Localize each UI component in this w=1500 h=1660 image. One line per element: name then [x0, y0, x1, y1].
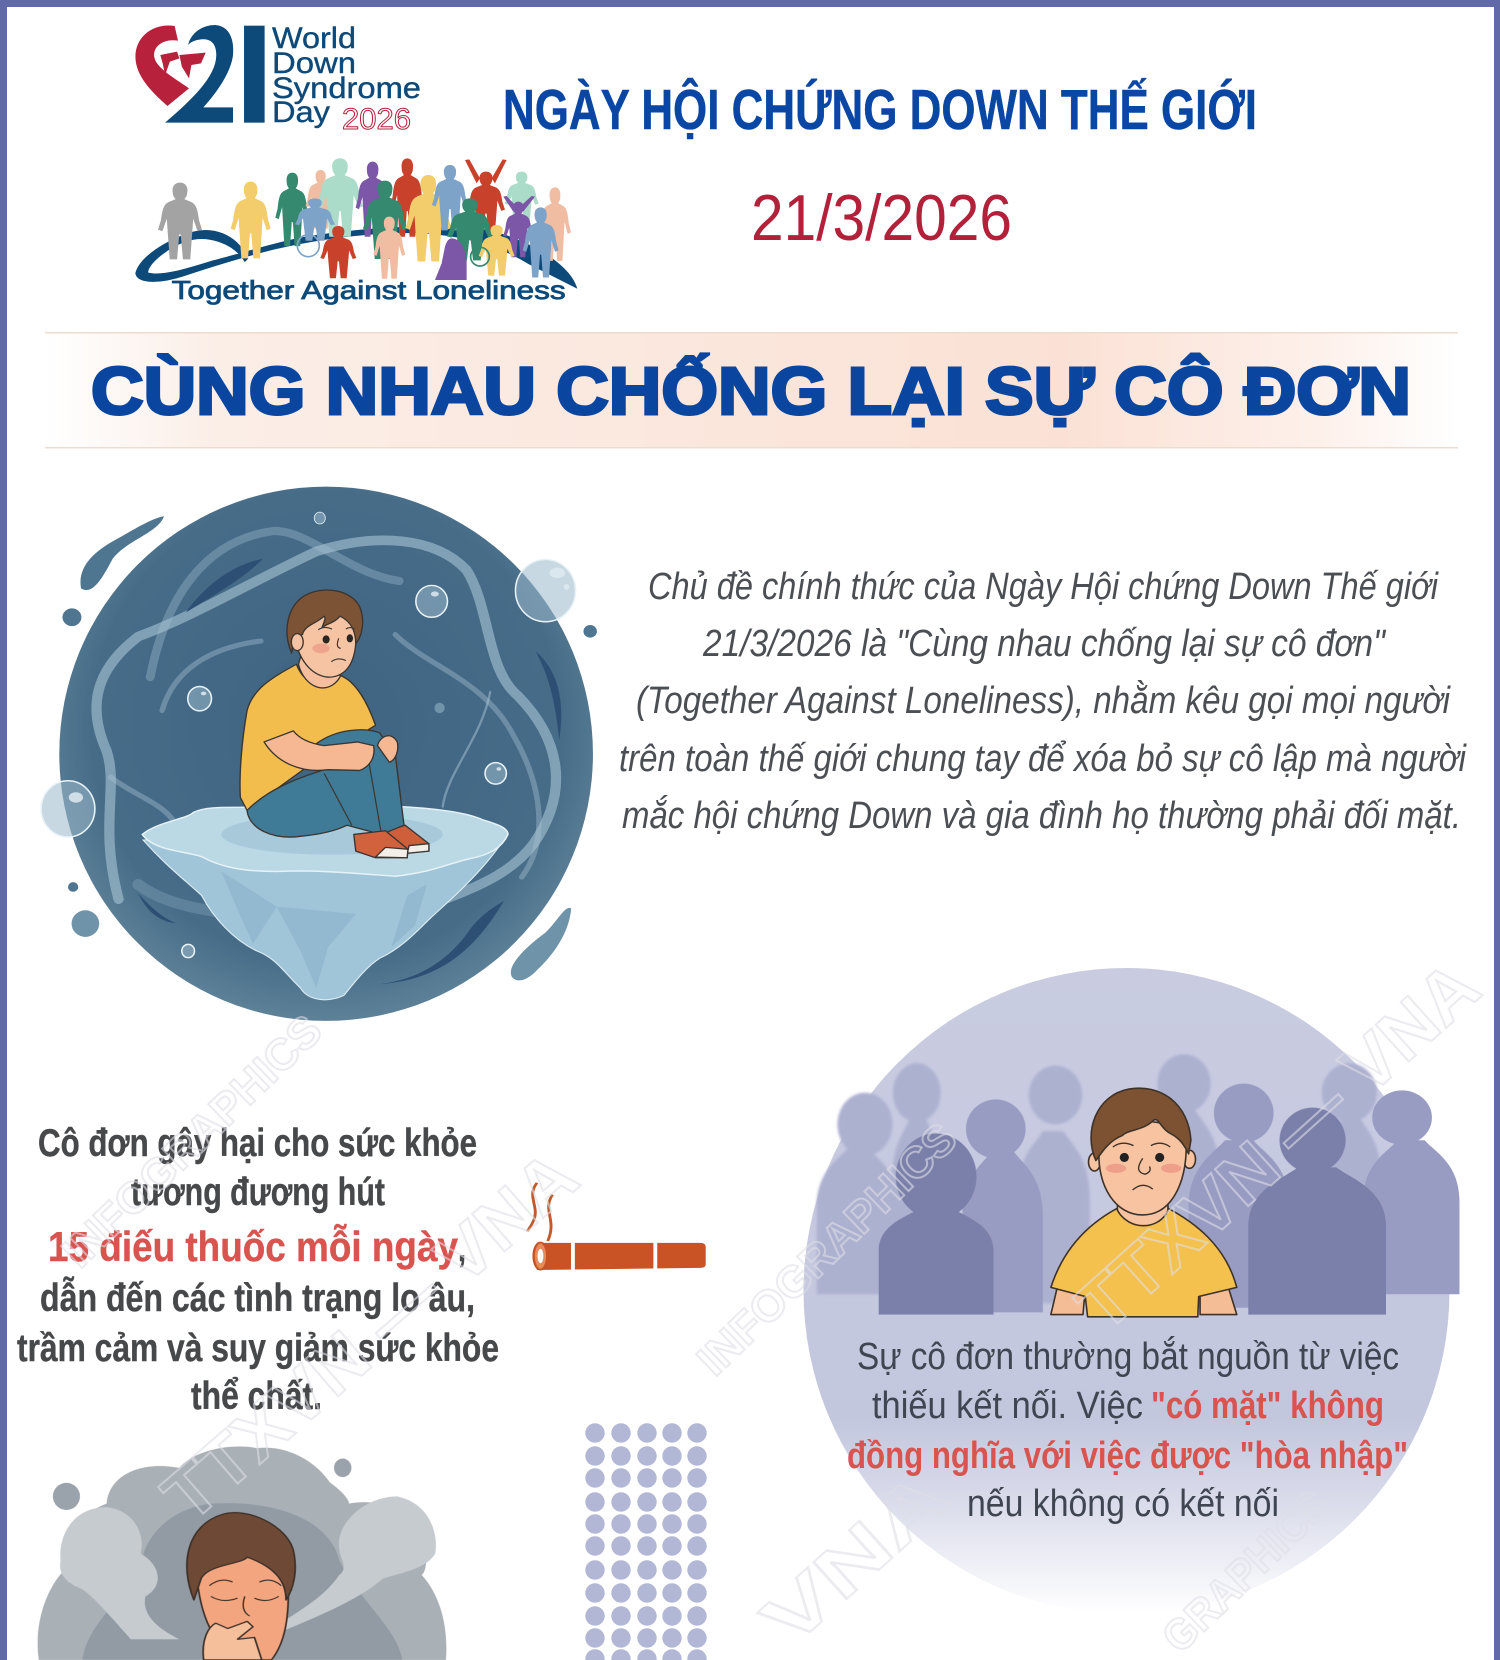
boy [1051, 1088, 1237, 1317]
health impact text: tương đương hút [131, 1171, 385, 1214]
eyes and mouth [323, 634, 353, 644]
neck [1117, 1201, 1168, 1226]
yellow shirt [240, 664, 376, 810]
boy sitting [240, 590, 429, 858]
smoke [527, 1183, 553, 1241]
intro paragraph: 21/3/2026 là "Cùng nhau chống lại sự cô đơn" [702, 623, 1386, 665]
shirt [1051, 1208, 1237, 1317]
dark streaks [138, 559, 561, 984]
brows, nose, mouth [1113, 1143, 1170, 1190]
iceberg [142, 807, 508, 1000]
campaign logo: Together Against Loneliness [137, 158, 575, 305]
neck [298, 644, 344, 688]
watermarks: INFOGRAPHICS [688, 1114, 967, 1385]
face [1099, 1122, 1186, 1215]
far shoe [381, 825, 429, 853]
watermarks: TTXVN — VNA [1062, 946, 1495, 1347]
circle text: thiếu kết nối. Việc [872, 1385, 1143, 1427]
ears [1089, 1153, 1100, 1171]
middle silhouettes [962, 1084, 1459, 1312]
crowd silhouettes [158, 158, 571, 280]
circle text [847, 1335, 1408, 1525]
back silhouettes [817, 1054, 1381, 1303]
icon: numeral 21 [165, 25, 265, 123]
illustration: boy among silhouettes [817, 1054, 1459, 1317]
circle text: nếu không có kết nối [967, 1483, 1279, 1525]
illustration: man smoking in a smoke cloud [38, 1446, 446, 1660]
health impact text: 15 điếu thuốc mỗi ngày [48, 1222, 459, 1270]
health impact text [17, 1122, 499, 1418]
logo year: 2026 [342, 103, 411, 136]
arm and hands [264, 731, 398, 770]
circle text: Sự cô đơn thường bắt nguồn từ việc [857, 1335, 1399, 1378]
banner [45, 332, 1458, 448]
closed eyes and nose [209, 1580, 281, 1616]
wheelchair wheels [297, 235, 489, 266]
campaign slogan: Together Against Loneliness [172, 275, 566, 305]
watermarks: GRAPHICS [1153, 1481, 1338, 1660]
logo wordmark: Day [272, 96, 330, 129]
swirling currents [96, 531, 556, 932]
health impact text: Cô đơn gây hại cho sức khỏe [38, 1122, 477, 1165]
dark sphere [59, 487, 593, 1021]
health impact text: trầm cảm và suy giảm sức khỏe [17, 1327, 499, 1370]
ribbon [137, 228, 575, 286]
hand [203, 1621, 262, 1660]
hair [187, 1513, 295, 1600]
jeans [247, 730, 404, 837]
circle text: "có mặt" không [1151, 1385, 1384, 1427]
logo wordmark: World [272, 22, 356, 55]
light smoke puffs [60, 1496, 436, 1639]
arms [1051, 1285, 1237, 1315]
lilac circle [804, 968, 1450, 1614]
logo wordmark: Syndrome [272, 72, 421, 105]
health impact text: thể chất. [191, 1375, 322, 1418]
panel: crowd circle [804, 968, 1459, 1614]
hair [287, 590, 363, 653]
bubble highlights [69, 568, 569, 803]
watermarks [53, 946, 1495, 1660]
health impact text: , [458, 1227, 466, 1270]
intro paragraph [619, 566, 1467, 837]
hair [1091, 1088, 1191, 1161]
logo wordmark: Down [272, 47, 356, 80]
dot pattern [585, 1423, 707, 1660]
logo: World Down Syndrome Day 2026 [135, 22, 421, 136]
bubbles [41, 512, 576, 958]
illustration: boy alone on iceberg in a bubble [41, 487, 597, 1021]
eyes [1120, 1153, 1164, 1162]
logo wordmark [272, 22, 421, 129]
face [294, 608, 356, 677]
watermarks: TTXVN — VNA [148, 1136, 593, 1537]
watermarks: VNA [747, 1455, 964, 1660]
banner title: CÙNG NHAU CHỐNG LẠI SỰ CÔ ĐƠN [91, 353, 1411, 429]
date: 21/3/2026 [751, 181, 1012, 254]
watermarks: INFOGRAPHICS [53, 1006, 332, 1277]
face [196, 1549, 288, 1660]
heading: world day title: NGÀY HỘI CHỨNG DOWN THẾ GIỚI [503, 77, 1257, 142]
health impact text: dẫn đến các tình trạng lo âu, [40, 1276, 475, 1320]
loose smoke puffs [53, 1459, 351, 1510]
front silhouettes [879, 1108, 1386, 1315]
dark smoke cloud [38, 1446, 446, 1660]
ear [291, 634, 303, 651]
icon: burning cigarette [527, 1183, 706, 1271]
near shoe [354, 831, 408, 858]
man [187, 1513, 295, 1660]
icon: red heart with world map [135, 26, 206, 106]
outside blobs [62, 516, 597, 980]
